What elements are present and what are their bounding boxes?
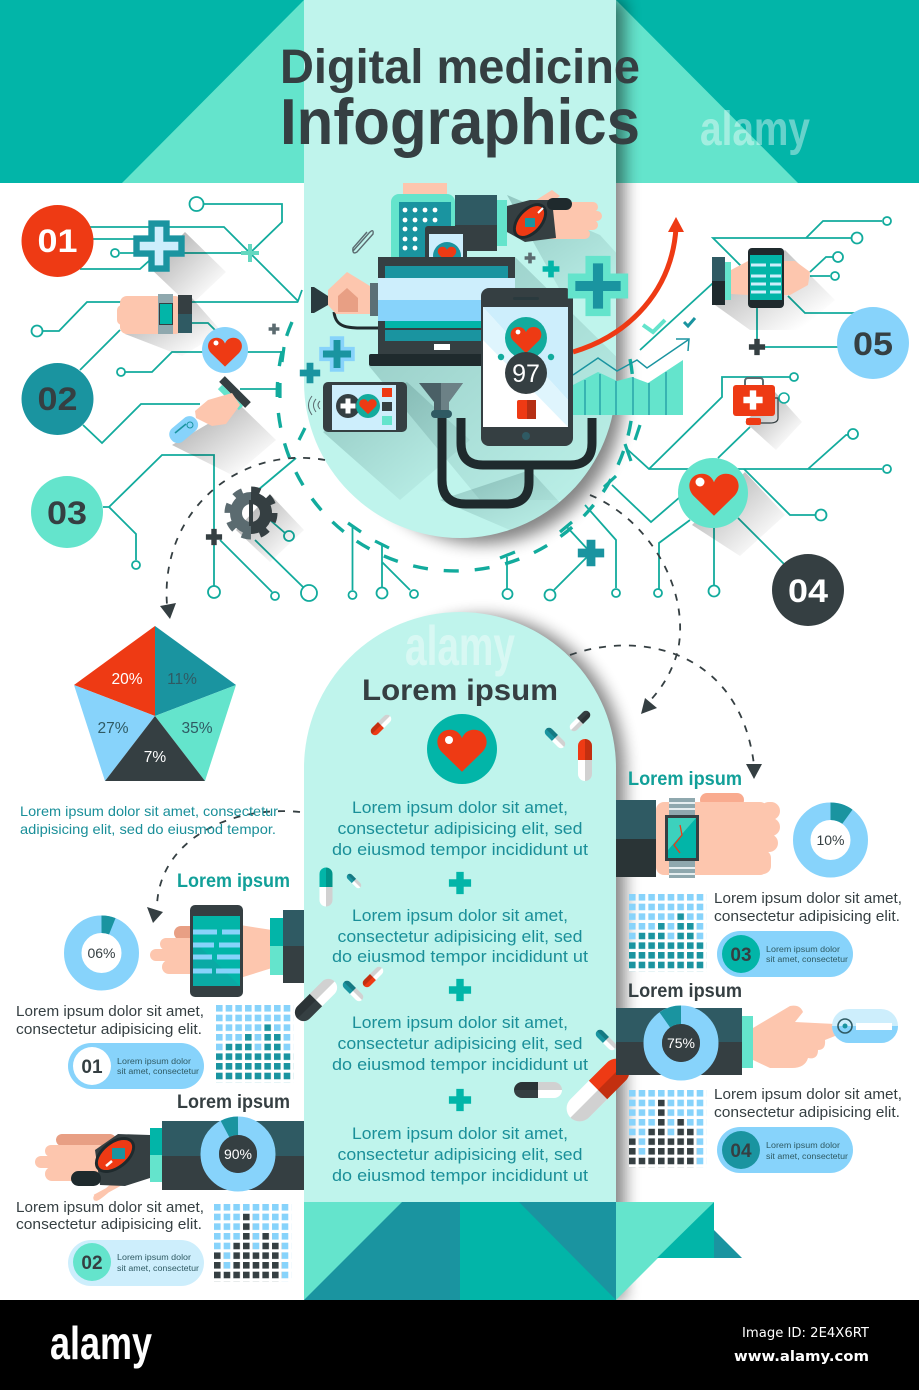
centre text block 3: do eiusmod tempor incididunt ut bbox=[332, 1056, 588, 1074]
plus divider 2 bbox=[449, 979, 471, 1001]
pill 02: 02 bbox=[81, 1253, 103, 1274]
laptop bbox=[369, 257, 515, 366]
icon: gear bbox=[228, 490, 304, 562]
donut 75%: 75% bbox=[667, 1035, 695, 1051]
pentagon caption: adipisicing elit, sed do eiusmod tempor. bbox=[20, 821, 276, 837]
centre text block 2: consectetur adipisicing elit, sed bbox=[338, 928, 582, 946]
pill 03: 03 bbox=[730, 945, 752, 966]
pixel chart 04 bbox=[629, 1090, 706, 1167]
donut 06%: 06% bbox=[87, 945, 116, 961]
centre text block 1: consectetur adipisicing elit, sed bbox=[338, 820, 582, 838]
small phone bbox=[425, 226, 467, 270]
pill 03: sit amet, consectetur bbox=[766, 954, 848, 964]
section 02: gloved hand: Lorem ipsum dolor sit amet, bbox=[16, 1199, 204, 1216]
circuit: ring junction ticks bbox=[280, 347, 640, 558]
pixel chart 02 bbox=[214, 1204, 291, 1281]
panel: lower centre arch bbox=[304, 612, 616, 1202]
number 05 bbox=[837, 307, 909, 379]
pixel chart 01 bbox=[216, 1005, 293, 1082]
long shadows on panel bbox=[323, 195, 616, 530]
large phone: 97 bbox=[512, 360, 540, 388]
pill 01: 01 bbox=[81, 1057, 103, 1078]
footer logo: alamy bbox=[50, 1317, 152, 1369]
section 03: watch hand: Lorem ipsum dolor sit amet, bbox=[714, 890, 902, 907]
pentagon chart: 35% bbox=[181, 720, 213, 737]
stethoscope tubes bbox=[442, 418, 592, 504]
plus divider 3 bbox=[449, 1089, 471, 1111]
hand with chest piece bbox=[311, 272, 378, 328]
number 04 bbox=[772, 554, 844, 626]
pill 02: sit amet, consectetur bbox=[117, 1263, 199, 1273]
donut 75% bbox=[653, 1015, 709, 1071]
central illustration bbox=[300, 183, 695, 530]
pill 01: sit amet, consectetur bbox=[117, 1066, 199, 1076]
title bbox=[280, 41, 640, 158]
section 04: oximeter hand bbox=[616, 981, 902, 1173]
centre text block 3: Lorem ipsum dolor sit amet, bbox=[352, 1014, 568, 1032]
number 05: 05 bbox=[853, 326, 893, 362]
number 03: 03 bbox=[47, 495, 87, 531]
number 02: 02 bbox=[38, 381, 78, 417]
circuit: left lines bbox=[32, 197, 317, 601]
title: Digital medicine bbox=[280, 41, 640, 94]
centre text block 1: do eiusmod tempor incididunt ut bbox=[332, 841, 588, 859]
pixel chart 03 bbox=[629, 894, 706, 971]
centre text block 4: Lorem ipsum dolor sit amet, bbox=[352, 1125, 568, 1143]
pills bbox=[291, 709, 635, 1127]
section 04: oximeter hand: consectetur adipisicing elit. bbox=[714, 1104, 900, 1121]
plus mark right bbox=[749, 339, 765, 355]
pill 01 bbox=[68, 1043, 204, 1089]
section 04: oximeter hand: Lorem ipsum bbox=[628, 981, 742, 1002]
section 02: gloved hand: consectetur adipisicing elit. bbox=[16, 1216, 202, 1233]
sleeve upper bbox=[455, 195, 507, 251]
watermark: alamy bbox=[700, 103, 810, 156]
gloved hand with device bbox=[506, 190, 602, 245]
landscape phone bbox=[323, 382, 407, 432]
pill 04: Lorem ipsum dolor bbox=[766, 1140, 840, 1150]
number 03 bbox=[31, 476, 103, 548]
bottom ribbon bbox=[304, 1202, 742, 1300]
centre heading: Lorem ipsum bbox=[362, 674, 558, 707]
centre text block 4: do eiusmod tempor incididunt ut bbox=[332, 1167, 588, 1185]
pentagon chart: 20% bbox=[111, 671, 143, 688]
pentagon caption bbox=[20, 803, 278, 837]
area chart bbox=[573, 339, 689, 415]
number 02 bbox=[22, 363, 94, 435]
section 03: watch hand: consectetur adipisicing elit. bbox=[714, 908, 900, 925]
hand behind tablet bbox=[403, 183, 447, 197]
hand with phone bbox=[150, 905, 304, 997]
wifi arcs bbox=[308, 396, 320, 415]
circuit: dashed ring bbox=[277, 322, 633, 571]
panel: upper centre bbox=[304, 0, 616, 538]
pentagon chart: 11% bbox=[167, 671, 197, 688]
centre text block 2: do eiusmod tempor incididunt ut bbox=[332, 948, 588, 966]
dashed arrow to left hand bbox=[147, 811, 300, 923]
donut 90%: 90% bbox=[224, 1146, 252, 1162]
footer image id bbox=[734, 1326, 869, 1365]
dashed arrow to watch bbox=[570, 645, 762, 779]
big medical cross bbox=[572, 260, 624, 312]
footer image id: www.alamy.com bbox=[734, 1349, 869, 1365]
section 01: phone hand: consectetur adipisicing elit. bbox=[16, 1021, 202, 1038]
icon: phone on wrist bbox=[712, 248, 835, 330]
donut 10%: 10% bbox=[816, 832, 845, 848]
footer image id: Image ID: 2E4X6RT bbox=[742, 1326, 869, 1341]
centre text block 1: Lorem ipsum dolor sit amet, bbox=[352, 799, 568, 817]
centre text block 2: Lorem ipsum dolor sit amet, bbox=[352, 907, 568, 925]
icon: medical cross bbox=[136, 224, 226, 306]
icon: large heart badge bbox=[678, 458, 785, 556]
section 02: gloved hand: Lorem ipsum bbox=[177, 1092, 290, 1113]
red arrow curve bbox=[573, 217, 684, 352]
section 02: gloved hand bbox=[16, 1092, 304, 1286]
icon: heart badge bbox=[202, 327, 248, 373]
pill 02: Lorem ipsum dolor bbox=[117, 1252, 191, 1262]
panel drop shadows bbox=[340, 0, 625, 1300]
pentagon caption: Lorem ipsum dolor sit amet, consectetur bbox=[20, 803, 278, 819]
number 04: 04 bbox=[788, 573, 828, 609]
small plus signs bbox=[300, 253, 559, 383]
pointing hand with oximeter bbox=[616, 1006, 898, 1075]
centre text block 4 bbox=[332, 1125, 588, 1185]
donut 06% bbox=[73, 924, 130, 982]
circuit: bottom lines bbox=[348, 505, 620, 600]
section 03: watch hand: Lorem ipsum bbox=[628, 769, 742, 790]
pill 03: Lorem ipsum dolor bbox=[766, 944, 840, 954]
number 01 bbox=[22, 205, 94, 277]
pill 04: 04 bbox=[730, 1141, 752, 1162]
plus mark bottom bbox=[578, 540, 604, 566]
centre text block 1 bbox=[332, 799, 588, 859]
footer bar bbox=[0, 1300, 919, 1390]
centre text block 2 bbox=[332, 907, 588, 966]
section 01: phone hand: Lorem ipsum dolor sit amet, bbox=[16, 1003, 204, 1020]
section 04: oximeter hand: Lorem ipsum dolor sit amet, bbox=[714, 1086, 902, 1103]
circuit: right lines bbox=[612, 217, 891, 597]
number 01: 01 bbox=[38, 223, 78, 259]
tablet with dots bbox=[391, 194, 455, 266]
check marks bbox=[643, 318, 695, 332]
pentagon chart: 7% bbox=[144, 749, 166, 766]
watermark panel: alamy bbox=[405, 614, 515, 677]
stethoscope head bbox=[419, 383, 463, 418]
centre text block 3 bbox=[332, 1014, 588, 1074]
centre text block 4: consectetur adipisicing elit, sed bbox=[338, 1146, 582, 1164]
paperclip bbox=[353, 231, 373, 253]
dashed arrow to pentagon bbox=[160, 458, 325, 619]
centre heart icon bbox=[427, 714, 497, 784]
pentagon chart bbox=[74, 626, 236, 781]
donut 90% bbox=[210, 1126, 266, 1182]
fist with smart watch bbox=[616, 793, 780, 878]
pill 04: sit amet, consectetur bbox=[766, 1151, 848, 1161]
section 01: phone hand: Lorem ipsum bbox=[177, 871, 290, 892]
blue medical cross bbox=[321, 338, 353, 370]
plus divider 1 bbox=[449, 872, 471, 894]
icon: first aid kit bbox=[733, 378, 802, 450]
title: Infographics bbox=[280, 85, 640, 158]
pill 04 bbox=[717, 1127, 853, 1173]
pentagon chart: 27% bbox=[97, 720, 129, 737]
centre text block 3: consectetur adipisicing elit, sed bbox=[338, 1035, 582, 1053]
icon: wrist watch hand bbox=[117, 294, 222, 356]
pill 01: Lorem ipsum dolor bbox=[117, 1056, 191, 1066]
hand with sensor bbox=[35, 1121, 304, 1198]
pill 03 bbox=[717, 931, 853, 977]
header band bbox=[0, 0, 919, 183]
icon: plus marks left bbox=[206, 324, 279, 545]
section 03: watch hand bbox=[616, 769, 902, 977]
icon: pointing hand with oximeter bbox=[166, 379, 276, 476]
dashed arrow to centre bbox=[590, 495, 680, 714]
pill 02 bbox=[68, 1240, 204, 1286]
large phone bbox=[481, 288, 573, 446]
section 01: phone hand bbox=[16, 871, 304, 1089]
donut 10% bbox=[802, 811, 859, 869]
